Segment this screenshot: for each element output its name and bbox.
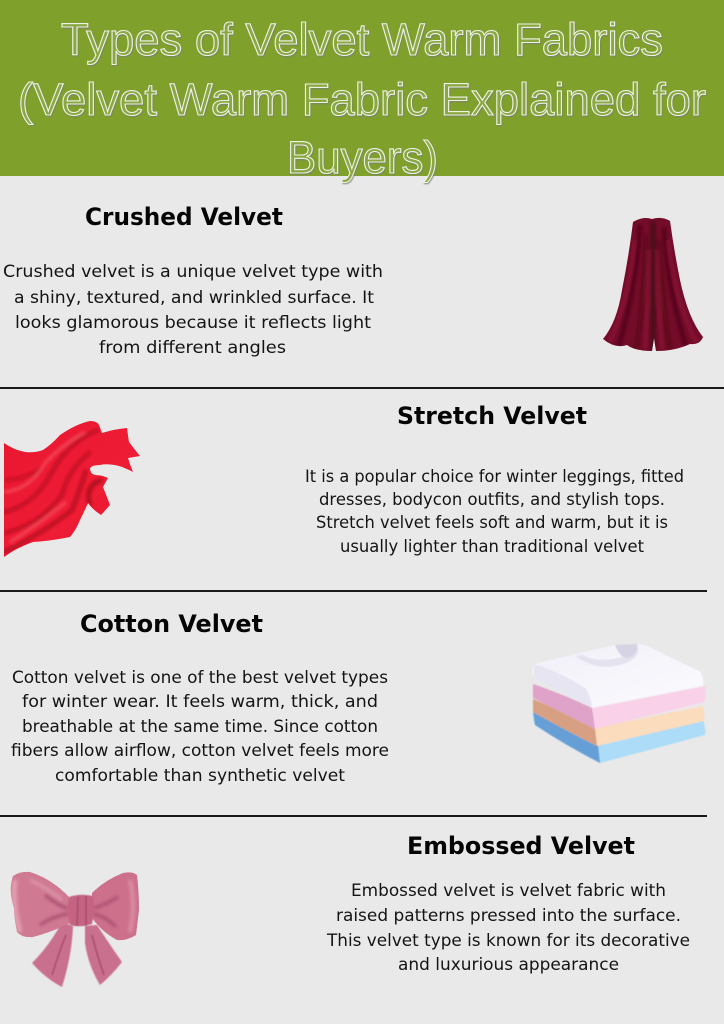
panel: embossed velvet: [326, 832, 690, 975]
heading: cotton velvet: Cotton Velvet: [80, 610, 263, 638]
text block: crushed velvet description: [3, 262, 383, 358]
divider: [0, 387, 724, 389]
peach shirt: [533, 699, 704, 746]
text block: stretch velvet description: It is a popular choice for winter leggings, fitted: [305, 467, 684, 487]
panel: crushed velvet: [0, 203, 706, 987]
text block: cotton velvet description: comfortable than synthetic velvet: [55, 766, 345, 786]
bow tails: [32, 922, 122, 987]
text block: embossed velvet description: Embossed velvet is velvet fabric with: [351, 881, 666, 901]
right bow wing: [92, 872, 139, 940]
icon: stack of folded shirts: [532, 644, 706, 763]
text block: stretch velvet description: Stretch velvet feels soft and warm, but it is: [316, 513, 668, 533]
left bow wing: [10, 872, 70, 938]
shirt collar: [575, 644, 638, 667]
heading: stretch velvet: Stretch Velvet: [397, 402, 587, 430]
title: Buyers): [287, 132, 438, 183]
text block: embossed velvet description: and luxurious appearance: [398, 955, 619, 975]
text block: stretch velvet description: [305, 467, 684, 557]
text block: crushed velvet description: looks glamorous because it reflects light: [15, 313, 371, 333]
text block: embossed velvet description: [326, 881, 690, 975]
text block: cotton velvet description: breathable at the same time. Since cotton: [22, 717, 378, 737]
icon: burgundy velvet cape: [603, 218, 703, 351]
text block: cotton velvet description: Cotton velvet is one of the best velvet types: [12, 668, 388, 688]
text block: cotton velvet description: fibers allow airflow, cotton velvet feels more: [11, 741, 389, 761]
header band: [0, 0, 724, 176]
title: [18, 14, 706, 183]
pink shirt: [533, 684, 706, 729]
text block: stretch velvet description: usually lighter than traditional velvet: [340, 537, 644, 557]
divider: [0, 815, 707, 817]
text block: embossed velvet description: raised patterns pressed into the surface.: [336, 906, 681, 926]
text block: embossed velvet description: This velvet type is known for its decorative: [326, 931, 690, 951]
bow knot: [68, 895, 94, 926]
white shirt: [532, 644, 703, 708]
text block: cotton velvet description: for winter wear. It feels warm, thick, and: [22, 692, 378, 712]
icon: pink velvet bow: [5, 868, 143, 987]
heading: crushed velvet: Crushed Velvet: [85, 203, 283, 231]
panel: cotton velvet: [11, 610, 389, 786]
divider: [0, 590, 707, 592]
text block: cotton velvet description: [11, 668, 389, 786]
title: Types of Velvet Warm Fabrics: [61, 14, 663, 65]
icon: red flowing fabric: [4, 421, 140, 557]
panel: stretch velvet: [305, 402, 684, 557]
title: (Velvet Warm Fabric Explained for: [18, 74, 706, 125]
text block: crushed velvet description: Crushed velvet is a unique velvet type with: [3, 262, 383, 282]
blue shirt: [533, 709, 705, 763]
text block: stretch velvet description: dresses, bodycon outfits, and stylish tops.: [319, 490, 665, 510]
text block: crushed velvet description: from different angles: [99, 338, 286, 358]
text block: crushed velvet description: a shiny, textured, and wrinkled surface. It: [14, 288, 374, 308]
heading: embossed velvet: Embossed Velvet: [407, 832, 635, 860]
